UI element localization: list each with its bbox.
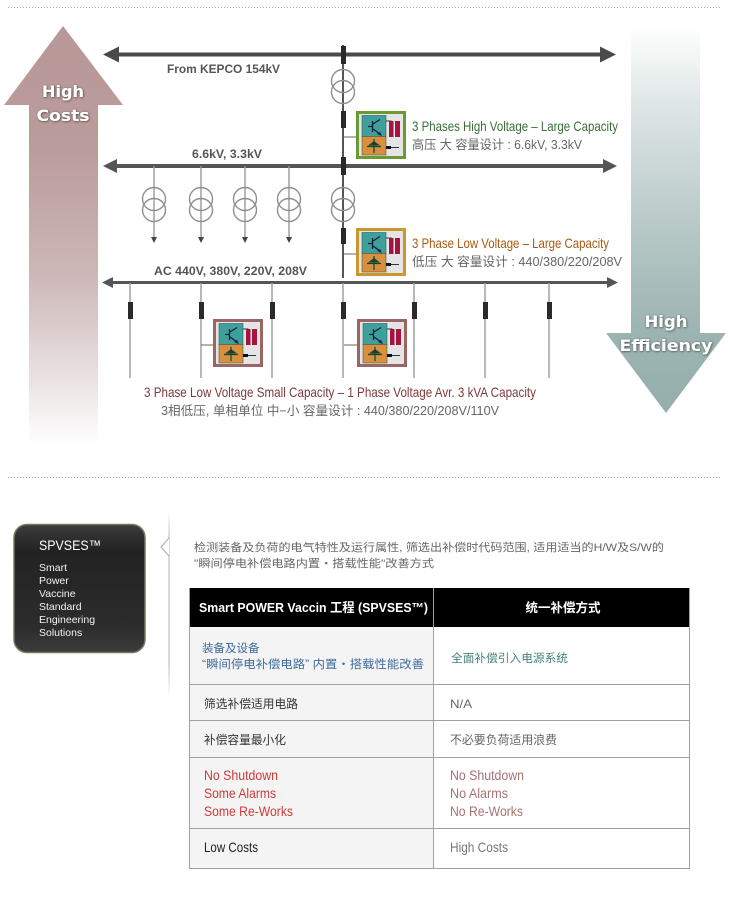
panel: SPVSES card (14, 524, 145, 652)
row: built in circuit: 全面补偿引入电源系统 (451, 651, 569, 665)
card list: Standard (39, 601, 82, 613)
card list: Solutions (39, 627, 82, 639)
table backgrounds (190, 588, 690, 868)
row: shutdown alarms: No Shutdown (204, 767, 278, 783)
row: shutdown alarms: No Re-Works (450, 803, 523, 819)
card list: Power (39, 575, 69, 587)
row: capacity minimise: 不必要负荷适用浪费 (450, 732, 557, 747)
card title: SPVSES™ (39, 537, 101, 553)
top dotted divider (8, 6, 722, 8)
comparison table (190, 588, 690, 868)
intro text: 检测装备及负荷的电气特性及运行属性, 筛选出补偿时代码范围, 适用适当的H/W及S/W的 (194, 540, 664, 554)
label: high voltage large capacity: 3 Phases High Voltage – Large Capacity (412, 118, 618, 134)
label: AC bus: AC 440V, 380V, 220V, 208V (154, 266, 307, 278)
label: small capacity chinese: 3相低压, 单相单位 中−小 容量设计 : 440/380/220/208V/110V (161, 403, 500, 418)
arrow: high efficiency (606, 25, 726, 413)
vertical divider (168, 510, 170, 700)
icon: divider pointer (161, 538, 169, 556)
row: shutdown alarms (204, 767, 524, 819)
row: capacity minimise (204, 732, 557, 747)
label: high efficiency: High (644, 312, 688, 331)
label: low voltage chinese: 低压 大 容量设计 : 440/380/220/208V (412, 254, 623, 269)
row: circuit selection: N/A (450, 697, 472, 711)
row: capacity minimise: 补偿容量最小化 (204, 732, 286, 747)
bus: AC low voltage (102, 277, 618, 288)
table header: Smart POWER Vaccin 工程 (SPVSES™) (199, 600, 428, 615)
row: shutdown alarms: No Alarms (450, 785, 508, 801)
icon: low voltage large module (358, 230, 404, 274)
row: costs (204, 839, 508, 855)
row: built in circuit: 装备及设备 (202, 641, 260, 655)
row: shutdown alarms: No Shutdown (450, 767, 524, 783)
icon: small capacity module 1 (214, 320, 262, 366)
arrow: high costs (4, 26, 123, 445)
label: high costs: High (42, 82, 84, 101)
single line diagram (102, 45, 618, 378)
row: costs: High Costs (450, 839, 508, 855)
table header: 统一补偿方式 (525, 600, 601, 615)
bus: from KEPCO (103, 46, 616, 62)
row: built in circuit (202, 641, 569, 671)
transformer: main (332, 70, 354, 104)
label: low voltage large capacity: 3 Phase Low Voltage – Large Capacity (412, 235, 609, 251)
card list: Smart (39, 562, 67, 574)
card list: Engineering (39, 614, 95, 626)
label: high efficiency (620, 312, 713, 355)
low voltage feeders (128, 137, 552, 378)
icon: small capacity module 2 (358, 320, 406, 366)
breakers on main line (341, 46, 346, 244)
row: built in circuit: “瞬间停电补偿电路” 内置・搭载性能改善 (202, 657, 424, 671)
row: shutdown alarms: Some Re-Works (204, 803, 293, 819)
label: high costs (36, 82, 90, 125)
icon: high voltage module (358, 112, 404, 158)
label: high voltage chinese: 高压 大 容量设计 : 6.6kV, 3.3kV (412, 137, 583, 152)
row: circuit selection: 筛选补偿适用电路 (204, 696, 298, 711)
label: small capacity: 3 Phase Low Voltage Small Capacity – 1 Phase Voltage Avr. 3 kVA Capacity (144, 384, 536, 400)
row: costs: Low Costs (204, 839, 258, 855)
label: high efficiency: Efficiency (620, 336, 713, 355)
label: 6.6kV bus: 6.6kV, 3.3kV (192, 149, 262, 161)
card list: Vaccine (39, 588, 76, 600)
intro text (194, 540, 664, 570)
label: KEPCO bus: From KEPCO 154kV (167, 64, 280, 76)
row: shutdown alarms: Some Alarms (204, 785, 276, 801)
main vertical line (342, 45, 344, 278)
bottom dotted divider (8, 476, 722, 478)
row: circuit selection (204, 696, 472, 711)
bus: 6.6kV (103, 159, 617, 173)
table header (199, 600, 601, 615)
intro text: "瞬间停电补偿电路内置・搭载性能"改善方式 (194, 556, 434, 570)
label: high costs: Costs (36, 106, 90, 125)
card list (39, 562, 95, 639)
feeder transformers on 6.6kV bus (142, 166, 354, 243)
